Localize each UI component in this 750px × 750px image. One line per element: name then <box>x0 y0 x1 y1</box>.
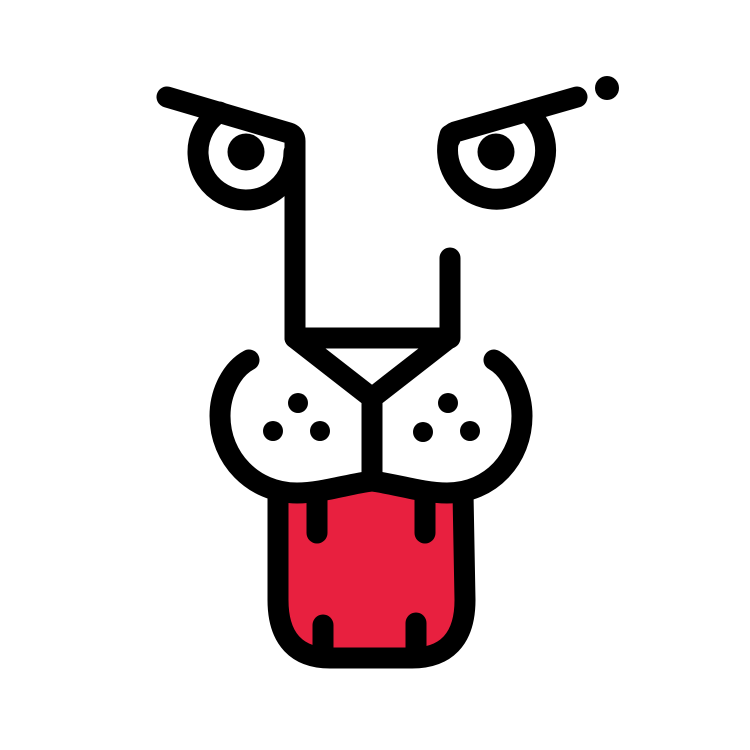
tongue <box>278 481 465 658</box>
muzzle <box>220 338 522 493</box>
whisker dots right <box>413 393 480 442</box>
whisker dots left <box>263 393 330 441</box>
left brow and nose bridge <box>167 97 295 338</box>
right brow <box>450 97 577 139</box>
right eye <box>448 111 546 199</box>
dot: top right <box>595 76 619 100</box>
left eye <box>198 112 294 200</box>
nose right line <box>440 258 460 338</box>
nose and mouth line <box>295 338 449 481</box>
